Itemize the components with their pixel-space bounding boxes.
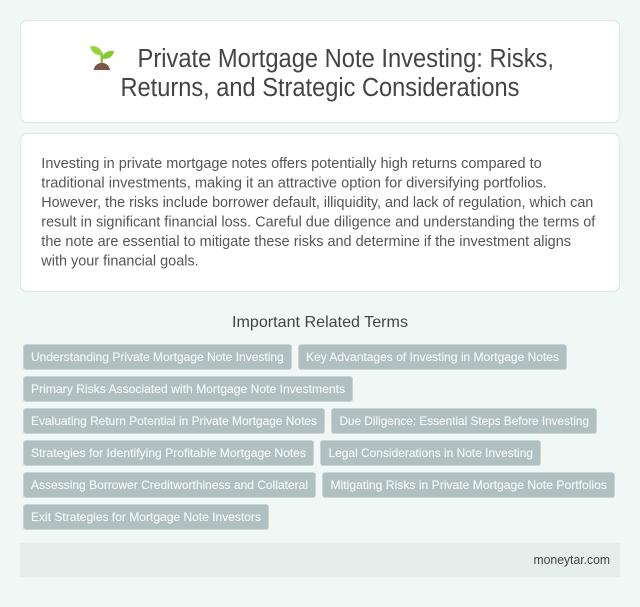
- tag: Legal Considerations in Note Investing: [328, 446, 533, 460]
- tag: [332, 408, 596, 434]
- footer bar: [20, 543, 620, 577]
- panel: title card: [20, 20, 620, 122]
- tag: [320, 440, 540, 466]
- summary text block: the note are essential to mitigate these risks and determine if the investment aligns: [41, 234, 571, 250]
- title: Private Mortgage Note Investing: Risks,: [138, 45, 554, 73]
- title: Returns, and Strategic Considerations: [120, 74, 520, 102]
- tag: Evaluating Return Potential in Private Mortgage Notes: [31, 414, 317, 428]
- tag: Key Advantages of Investing in Mortgage Notes: [306, 350, 559, 364]
- summary text block: result in significant financial loss. Careful due diligence and understanding the terms of: [41, 214, 596, 230]
- heading: important related terms: Important Related Terms: [232, 314, 408, 331]
- tag: Assessing Borrower Creditworthiness and Collateral: [31, 478, 308, 492]
- tag: [24, 440, 314, 466]
- title: [120, 45, 554, 102]
- tag list: [24, 344, 614, 530]
- summary text block: with your financial goals.: [40, 254, 199, 270]
- tag: Exit Strategies for Mortgage Note Investors: [31, 510, 261, 524]
- summary text block: However, the risks include borrower default, illiquidity, and lack of regulation, which can: [41, 195, 593, 211]
- footer source text: moneytar.com: [534, 552, 610, 567]
- tag: Understanding Private Mortgage Note Investing: [31, 350, 284, 364]
- tag: [24, 376, 352, 402]
- tag: Strategies for Identifying Profitable Mortgage Notes: [31, 446, 306, 460]
- summary text block: traditional investments, making it an attractive option for diversifying portfolios.: [41, 176, 547, 192]
- tag: [24, 408, 324, 434]
- tag: Due Diligence: Essential Steps Before Investing: [340, 414, 589, 428]
- summary text block: [40, 156, 596, 270]
- summary text block: Investing in private mortgage notes offers potentially high returns compared to: [41, 156, 542, 172]
- panel: summary card: [20, 134, 620, 292]
- tag: Mitigating Risks in Private Mortgage Note Portfolios: [330, 478, 607, 492]
- icon: sprout: [90, 46, 114, 70]
- tag: [24, 472, 316, 498]
- tag: [322, 472, 614, 498]
- tag: [298, 344, 566, 370]
- tag: Primary Risks Associated with Mortgage Note Investments: [31, 382, 345, 396]
- tag: [24, 504, 268, 530]
- tag: [24, 344, 292, 370]
